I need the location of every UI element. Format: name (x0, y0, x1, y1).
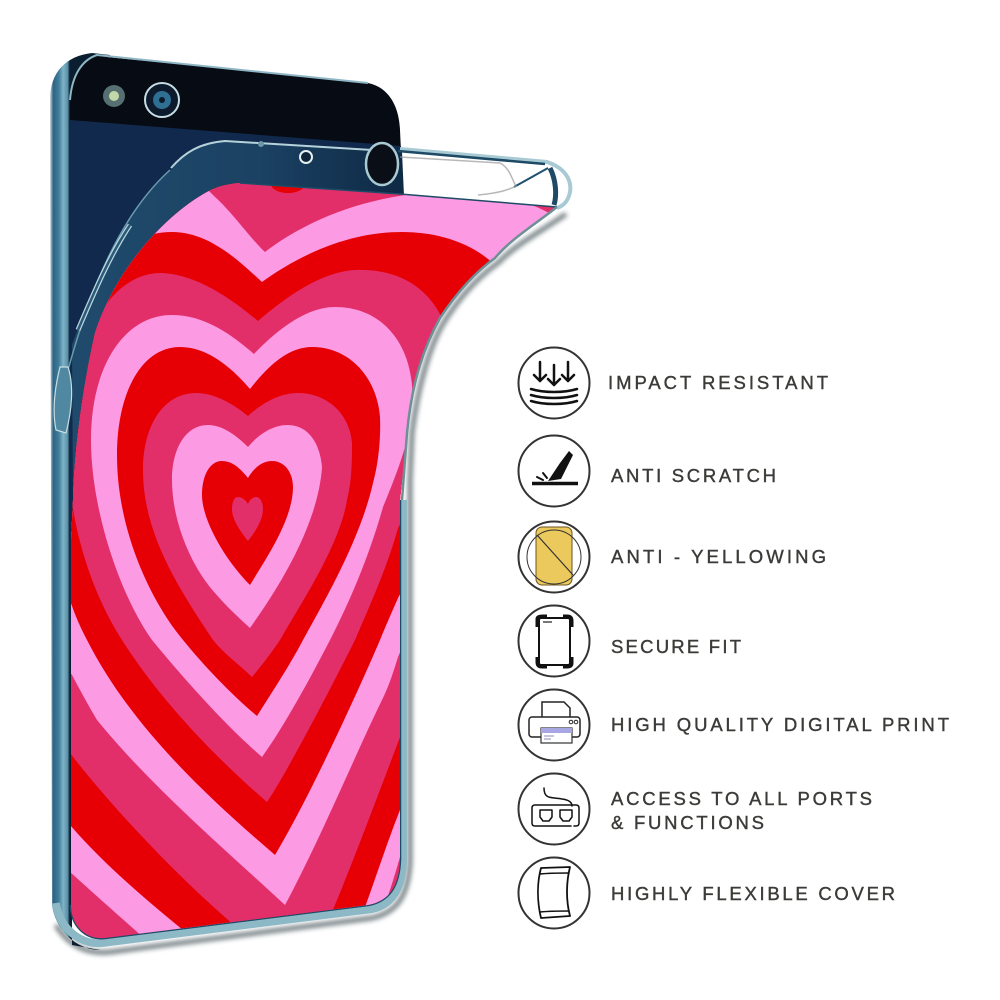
label (611, 788, 872, 833)
cover rim highlight (171, 141, 372, 168)
small cover hole (300, 151, 312, 163)
icon: bent cover (518, 858, 590, 928)
phone back navy lower panel (70, 120, 403, 640)
feature: secure fit (518, 606, 741, 676)
transparent cover body (72, 141, 404, 500)
cover left edge highlight (68, 170, 170, 370)
print curved edge line (402, 207, 557, 500)
icon: impact arrows (518, 348, 590, 418)
center heart (232, 497, 263, 541)
heart band 9 (71, 191, 548, 905)
camera flash (103, 85, 125, 107)
phone with transparent cover (50, 53, 572, 958)
print top edge line (240, 183, 557, 207)
label: & FUNCTIONS (611, 812, 764, 833)
heart band 10 (71, 183, 554, 922)
icon: yellow phone crossed out (518, 522, 590, 592)
feature: anti scratch (518, 436, 776, 506)
cover bottom inner dark line (71, 500, 400, 938)
heart band 8 (71, 232, 490, 855)
phone frame (50, 53, 110, 950)
side button on cover (78, 225, 130, 330)
feature: flexible cover (518, 858, 895, 928)
feature: impact resistant (518, 348, 828, 418)
heart band 12 (71, 183, 400, 934)
cover top right lip (398, 149, 570, 208)
volume bump on cover (54, 367, 72, 433)
printed heart pattern (71, 183, 554, 938)
icon: blade scratching a surface (518, 436, 590, 506)
shadow under phone and cover (56, 214, 566, 952)
heart band 11 (71, 183, 402, 928)
label: ACCESS TO ALL PORTS (611, 788, 872, 809)
phone top edge highlight (70, 55, 368, 100)
heart band 9 notch spot (272, 186, 303, 193)
label: HIGH QUALITY DIGITAL PRINT (611, 714, 949, 735)
heart band 7 (68, 270, 455, 802)
label: ANTI - YELLOWING (611, 546, 826, 567)
label: HIGHLY FLEXIBLE COVER (611, 883, 895, 904)
icon: phone with bumper corners (518, 606, 590, 676)
label: ANTI SCRATCH (611, 465, 776, 486)
camera cutout in cover (366, 143, 398, 185)
icon: ports with cable (518, 774, 590, 844)
camera lens (145, 83, 179, 117)
label: SECURE FIT (611, 636, 741, 657)
heart band 4 (143, 393, 352, 677)
heart band 5 (117, 347, 380, 716)
phone back top band (70, 56, 403, 300)
feature: access to ports (518, 774, 872, 844)
heart band 2 (202, 461, 293, 585)
cover bottom edge (56, 500, 403, 943)
heart band 3 (172, 425, 322, 628)
microphone hole (258, 141, 264, 147)
feature: digital print (518, 690, 949, 760)
feature: anti yellowing (518, 522, 826, 592)
label: IMPACT RESISTANT (608, 372, 828, 393)
icon: printer (518, 690, 590, 760)
heart band 6 (91, 307, 412, 757)
